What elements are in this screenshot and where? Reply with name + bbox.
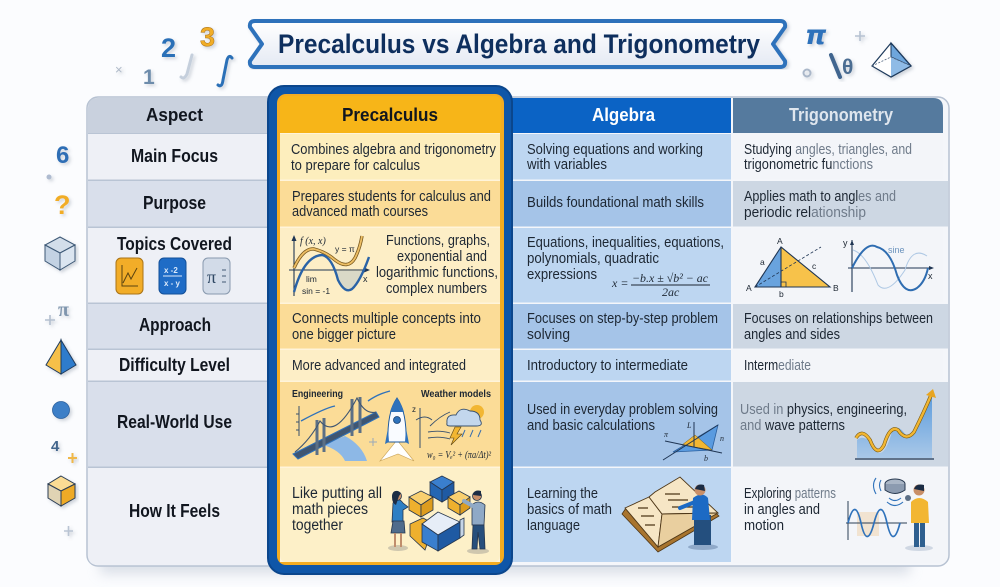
precalculus: main focus (280, 134, 500, 180)
algebra: topics: expressions (527, 267, 597, 283)
precalculus: approach (280, 304, 500, 348)
row label: main focus (88, 134, 270, 180)
icon: fraction tile: x - y (164, 279, 181, 288)
precalculus: how it feels (280, 468, 500, 562)
illustration: intersecting triangle (663, 421, 724, 463)
algebra: how it feels: basics of math (527, 502, 612, 518)
algebra: real-world use: and basic calculations (527, 418, 655, 434)
algebra: how it feels: Learning the (527, 486, 598, 502)
title banner (250, 21, 785, 67)
panel: algebra column (505, 98, 731, 562)
icon: graph tile (116, 258, 143, 294)
formula: w₀ = Vₑ² + (πa/Δt)² (427, 450, 492, 461)
algebra: approach (505, 304, 731, 348)
precalculus: how it feels: together (292, 517, 343, 534)
algebra header (505, 98, 731, 133)
algebra: main focus (505, 134, 731, 180)
quadratic formula (611, 271, 710, 299)
decorative math symbols: top right: π (805, 20, 827, 51)
decorative math symbols: top left: 3 (200, 22, 215, 52)
illustration: engineering bridge (292, 389, 390, 461)
diagram: triangle: b (779, 289, 784, 299)
illustration: rocket (369, 398, 414, 461)
precalculus: topics (280, 228, 500, 302)
row label: purpose (88, 181, 270, 226)
quadratic formula: 2ac (662, 285, 680, 299)
precalculus: topics: complex numbers (386, 281, 487, 297)
precalculus: topics: logarithmic functions, (376, 265, 498, 281)
decorative math symbols: top left: 2 (161, 33, 176, 63)
precalculus: topics: Functions, graphs, (386, 233, 490, 249)
algebra: difficulty (505, 350, 731, 380)
trigonometry: main focus (733, 134, 943, 180)
row label: real-world use (88, 382, 270, 466)
precalculus: purpose (280, 181, 500, 226)
algebra: difficulty: Introductory to intermediate (527, 358, 688, 374)
algebra: how it feels: language (527, 518, 580, 534)
icon: fraction tile (159, 258, 186, 294)
precalculus: difficulty: More advanced and integrated (292, 358, 466, 374)
trigonometry: real-world use: and wave patterns (740, 418, 845, 434)
icon: pi tile: π (207, 267, 216, 287)
row label: difficulty level (88, 350, 270, 380)
quadratic formula: x = (611, 276, 628, 290)
table card (87, 97, 949, 566)
decorative math symbols: top right (804, 20, 911, 79)
illustration: engineering bridge: Engineering (292, 389, 343, 400)
trigonometry: difficulty (733, 350, 943, 380)
illustration: open book and reader (622, 477, 719, 552)
chart: function graph: lim (306, 274, 317, 284)
precalculus: main focus: Combines algebra and trigonometry (291, 142, 497, 158)
icon: fraction tile: x -2 (164, 266, 178, 275)
diagram: sine wave: sine (888, 245, 905, 255)
trigonometry: main focus: Studying angles, triangles, and (744, 142, 912, 158)
algebra: topics (505, 228, 731, 302)
precalculus: how it feels: math pieces (292, 501, 368, 518)
trigonometry: how it feels: in angles and (744, 502, 820, 518)
algebra: purpose: Builds foundational math skills (527, 195, 704, 211)
diagram: triangle: A (746, 283, 752, 293)
precalculus: how it feels: Like putting all (292, 485, 382, 502)
illustration: intersecting triangle: n (720, 434, 724, 443)
algebra: main focus: with variables (526, 157, 607, 173)
precalculus: purpose: advanced math courses (292, 204, 428, 220)
algebra: approach: Focuses on step-by-step problem (527, 311, 718, 327)
illustration: intersecting triangle: L (686, 421, 692, 430)
trigonometry: approach: angles and sides (744, 327, 840, 343)
algebra: approach: solving (527, 327, 570, 343)
table shadow (100, 548, 910, 574)
chart: function graph: sin = -1 (302, 286, 330, 296)
algebra: topics: polynomials, quadratic (527, 251, 659, 267)
decorative math symbols: top left: × (115, 62, 123, 77)
algebra header: Algebra (592, 105, 656, 125)
row label: approach: Approach (139, 315, 211, 335)
algebra: how it feels (505, 468, 731, 562)
illustration: sensor, wave and person (846, 478, 933, 551)
aspect header (88, 98, 270, 133)
diagram: triangle: A (777, 236, 783, 246)
title banner: Precalculus vs Algebra and Trigonometry (278, 29, 760, 59)
illustration: weather models (412, 389, 492, 461)
diagram: triangle: B (833, 283, 839, 293)
diagram: triangle: c (812, 261, 817, 271)
illustration: weather models: z (412, 405, 416, 414)
aspect header: Aspect (146, 105, 203, 125)
trigonometry header: Trigonometry (789, 105, 893, 125)
algebra: topics: Equations, inequalities, equations, (527, 235, 724, 251)
precalculus: real-world use (280, 382, 500, 466)
trigonometry: topics (733, 228, 943, 302)
trigonometry: how it feels: Exploring patterns (744, 486, 836, 502)
decorative math symbols: top left: 1 (143, 66, 155, 89)
precalculus: topics: exponential and (397, 249, 487, 265)
diagram: triangle (746, 236, 839, 299)
trigonometry: real-world use: Used in physics, engineering, (740, 402, 907, 418)
trigonometry: approach (733, 304, 948, 348)
diagram: sine wave: y (843, 238, 848, 248)
decorative math symbols: left margin: ? (54, 190, 70, 220)
trigonometry: approach: Focuses on relationships between (744, 311, 933, 327)
illustration: intersecting triangle: b (704, 454, 708, 463)
icon: pi tile (203, 258, 230, 294)
precalculus header: Precalculus (342, 105, 438, 125)
algebra: real-world use: Used in everyday problem solving (527, 402, 718, 418)
trigonometry: how it feels (733, 468, 948, 563)
trigonometry: purpose: Applies math to angles and (744, 189, 896, 205)
chart: function graph: x (363, 274, 368, 284)
trigonometry: how it feels: motion (744, 518, 784, 534)
illustration: intersecting triangle: π (664, 430, 669, 439)
decorative math symbols: left margin: π (58, 299, 69, 321)
panel: aspect column (88, 98, 270, 565)
chart: function graph: f (x, x) (300, 236, 326, 247)
trigonometry header (733, 98, 943, 133)
diagram: triangle: a (760, 257, 765, 267)
trigonometry: main focus: trigonometric functions (744, 157, 873, 173)
precalculus: main focus: to prepare for calculus (291, 158, 420, 174)
precalculus: purpose: Prepares students for calculus and (292, 189, 491, 205)
panel: precalculus highlighted column (268, 86, 512, 574)
decorative math symbols: top left (115, 22, 232, 89)
chart: function graph: y = π (335, 244, 355, 254)
row label: main focus: Main Focus (131, 146, 218, 166)
illustration: people assembling puzzle cubes (388, 476, 489, 554)
decorative math symbols: left margin: 4 (51, 438, 60, 455)
row label: topics covered with icons: Topics Covered (117, 234, 232, 254)
trigonometry: real-world use (733, 382, 948, 466)
row label: difficulty level: Difficulty Level (119, 355, 230, 375)
row label: how it feels (88, 468, 270, 565)
precalculus: difficulty (280, 350, 500, 380)
chart: rising wave (855, 389, 936, 459)
precalculus: approach: one bigger picture (292, 327, 396, 343)
row label: approach (88, 304, 270, 348)
algebra: main focus: Solving equations and working (527, 142, 703, 158)
illustration: weather models: Weather models (421, 389, 491, 400)
trigonometry: difficulty: Intermediate (744, 358, 811, 374)
row label: topics covered with icons (88, 228, 270, 302)
row label: how it feels: How It Feels (129, 501, 220, 521)
row label: purpose: Purpose (143, 193, 206, 213)
quadratic formula: −b.x ± √b² − ac (632, 271, 709, 285)
chart: function graph (289, 235, 370, 296)
decorative math symbols: top right: θ (842, 56, 853, 79)
row label: real-world use: Real-World Use (117, 412, 232, 432)
diagram: sine wave (843, 238, 934, 292)
trigonometry: purpose (733, 181, 948, 226)
decorative math symbols: left margin: 6 (56, 142, 69, 169)
algebra: real-world use (505, 382, 731, 466)
decorative math symbols: left margin (45, 142, 77, 536)
panel: trigonometry column (733, 98, 948, 563)
diagram: sine wave: x (928, 271, 933, 281)
algebra: purpose (505, 181, 731, 226)
precalculus header (280, 96, 501, 133)
precalculus: approach: Connects multiple concepts into (292, 311, 481, 327)
trigonometry: purpose: periodic relationship (744, 205, 866, 221)
